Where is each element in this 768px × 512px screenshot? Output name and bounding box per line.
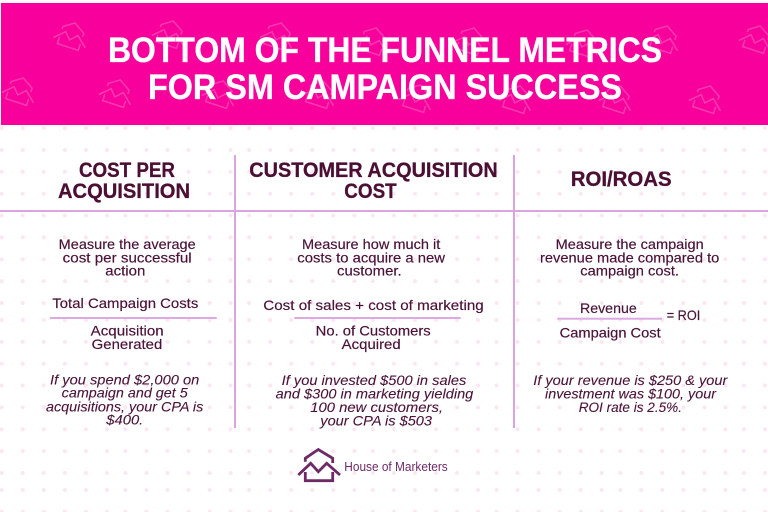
description: [540, 236, 720, 279]
example: and $300 in marketing yielding: [276, 386, 474, 402]
example: If your revenue is $250 & your: [533, 372, 729, 388]
example: acquisitions, your CPA is: [46, 398, 203, 414]
description: cost per successful: [63, 250, 192, 266]
formula: [50, 295, 217, 352]
banner watermark house icons: [0, 16, 768, 115]
dotted background pattern: [0, 125, 768, 512]
example: ROI rate is 2.5%.: [579, 399, 682, 415]
heading: customer acquisition cost: [249, 159, 498, 203]
heading: cost per acquisition: [58, 159, 190, 203]
panel: customer acquisition cost: [249, 159, 498, 428]
heading: cost per acquisition: COST PER: [79, 159, 175, 182]
header banner: [0, 3, 768, 125]
example: investment was $100, your: [545, 386, 717, 402]
example: campaign and get 5: [62, 385, 188, 401]
heading: customer acquisition cost: CUSTOMER ACQUISITION: [249, 159, 498, 182]
formula: = ROI: [667, 307, 700, 323]
example: your CPA is $503: [319, 412, 432, 428]
formula: Acquisition: [91, 323, 164, 339]
formula: [557, 300, 700, 340]
example: [46, 372, 203, 427]
heading: customer acquisition cost: COST: [344, 180, 397, 203]
description: Measure the average: [59, 236, 196, 252]
description: [297, 236, 446, 279]
example: 100 new customers,: [310, 399, 443, 415]
table grid lines: [0, 155, 768, 428]
description: [59, 236, 196, 279]
example: [533, 372, 729, 415]
example: If you spend $2,000 on: [50, 372, 200, 388]
logo: house of marketers: [298, 450, 448, 481]
example: $400.: [105, 411, 143, 427]
formula: Total Campaign Costs: [52, 295, 198, 311]
example: If you invested $500 in sales: [282, 372, 466, 388]
heading: cost per acquisition: ACQUISITION: [58, 180, 190, 203]
description: costs to acquire a new: [297, 250, 446, 266]
description: action: [105, 263, 145, 279]
formula: Revenue: [580, 300, 637, 316]
description: Measure how much it: [302, 236, 440, 252]
title: BOTTOM OF THE FUNNEL METRICS: [108, 31, 662, 70]
description: Measure the campaign: [556, 236, 704, 252]
icon: house with zigzag roof: [298, 450, 340, 481]
brand name: House of Marketers: [344, 459, 448, 474]
banner background: [1, 3, 768, 125]
title: FOR SM CAMPAIGN SUCCESS: [148, 68, 622, 107]
description: customer.: [337, 263, 402, 279]
description: revenue made compared to: [540, 250, 720, 266]
formula: Generated: [92, 336, 162, 352]
panel: roi/roas: [533, 168, 729, 415]
formula: Acquired: [342, 336, 401, 352]
formula: [263, 297, 484, 352]
panel: cost per acquisition: [46, 159, 217, 427]
formula: Campaign Cost: [560, 324, 661, 340]
formula: No. of Customers: [316, 323, 431, 339]
formula: Cost of sales + cost of marketing: [263, 297, 484, 313]
title: [108, 31, 662, 107]
heading: roi/roas: ROI/ROAS: [571, 168, 672, 191]
example: [276, 372, 474, 428]
description: campaign cost.: [580, 263, 679, 279]
